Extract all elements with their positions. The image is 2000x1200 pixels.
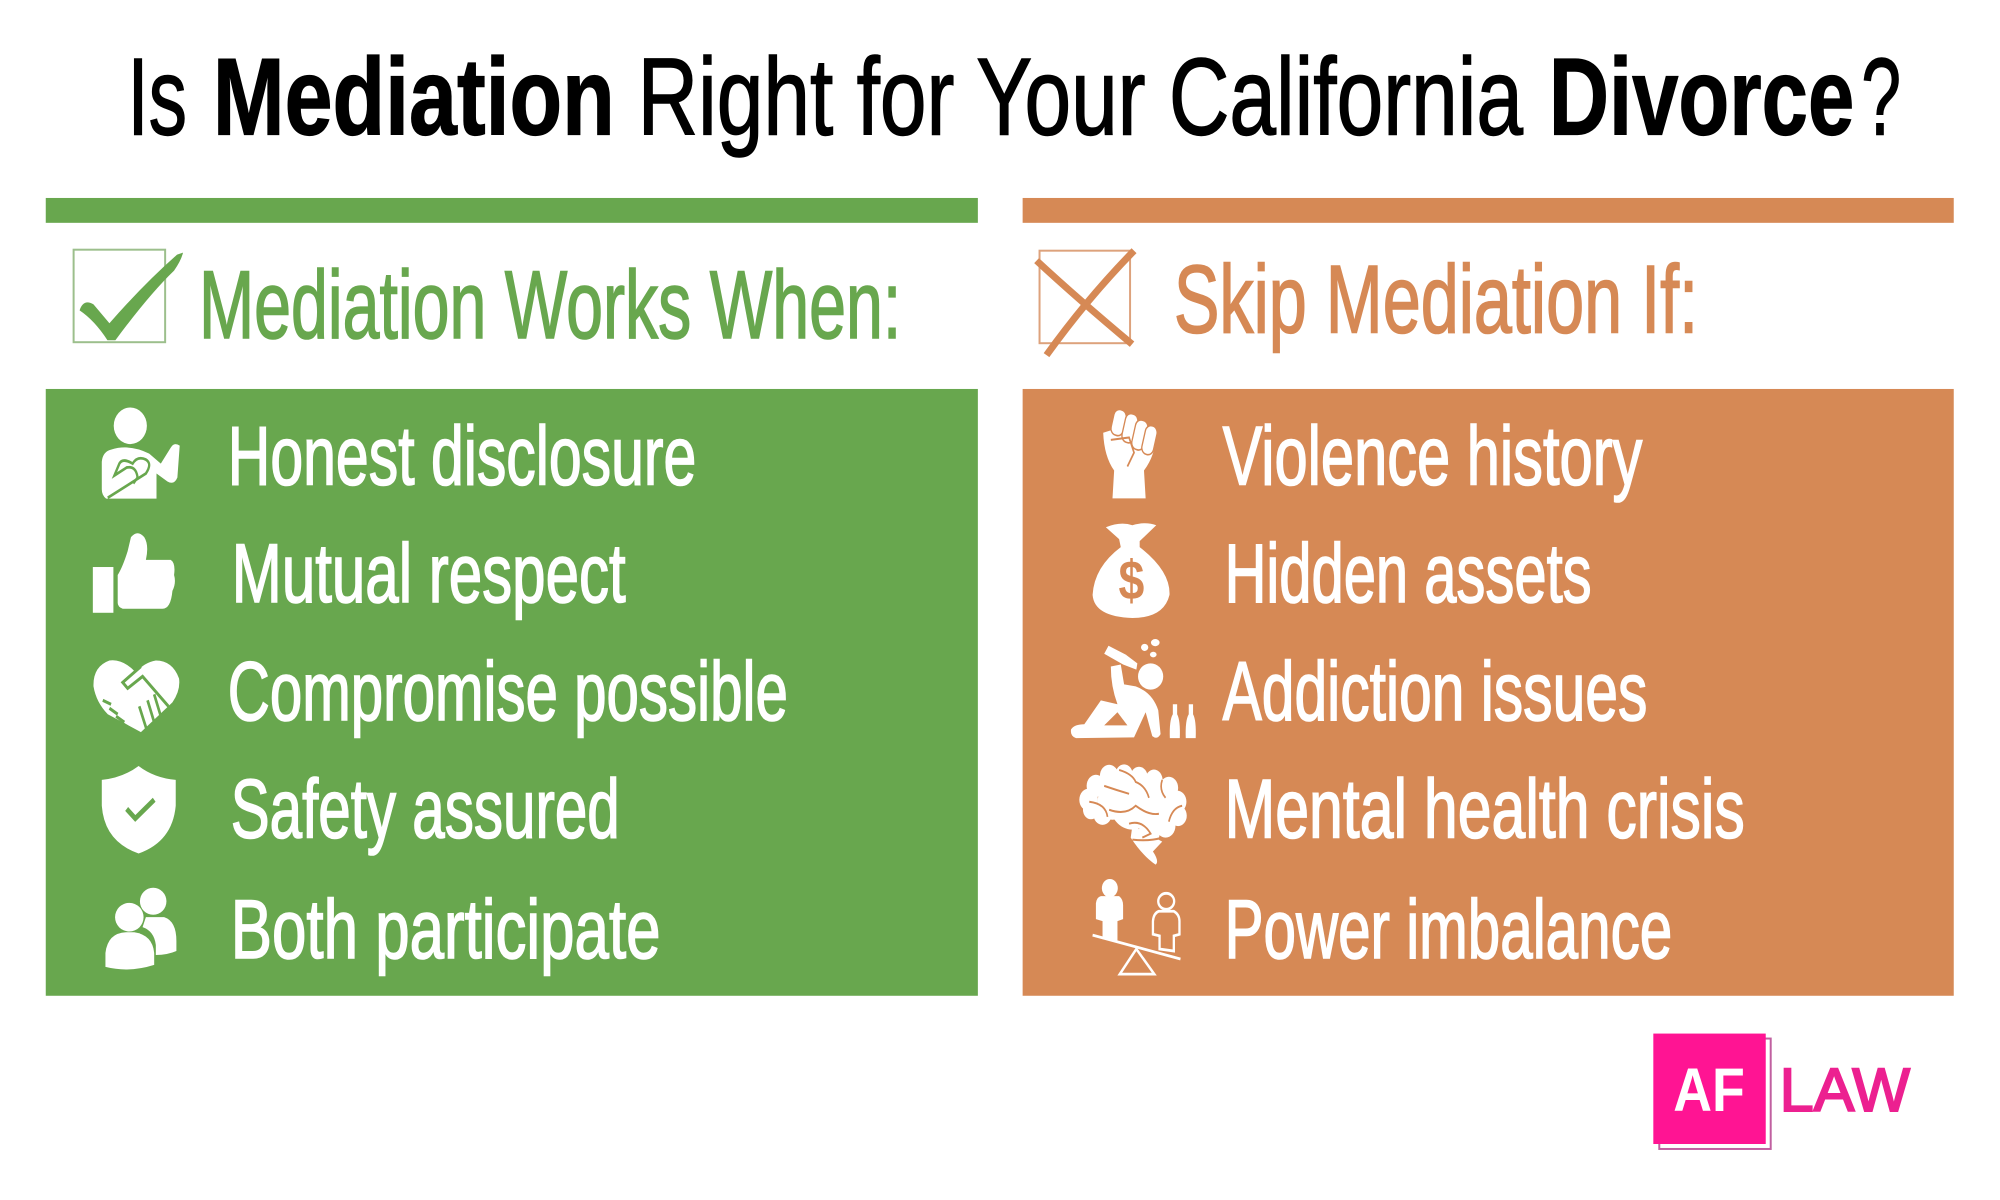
- text: safety assured: Safety assured: [231, 762, 620, 856]
- icon: x box: [1037, 251, 1134, 355]
- icon: safety shield: [102, 766, 176, 854]
- logo offset outline: [1659, 1039, 1771, 1149]
- heading: skip mediation if: Skip Mediation If:: [1174, 246, 1698, 353]
- green header bar: [46, 198, 978, 223]
- green list background: [46, 389, 978, 996]
- icon: drunk person with bottles: [1071, 639, 1196, 738]
- title: Is: [127, 36, 187, 158]
- icon: two people: [105, 888, 176, 969]
- orange list background: [1023, 389, 1954, 996]
- text: addiction issues: Addiction issues: [1223, 644, 1647, 738]
- title: [127, 36, 1901, 158]
- icon: raised fist: [1103, 408, 1158, 498]
- logo letters AF: AF: [1673, 1056, 1745, 1125]
- icon: check box: [74, 250, 183, 342]
- icon: honest person with heart: [102, 407, 180, 499]
- icon: thumbs up: [93, 533, 175, 613]
- text: mutual respect: Mutual respect: [232, 526, 626, 620]
- text: mental health crisis: Mental health crisis: [1225, 762, 1745, 856]
- panel: skip mediation if: [1023, 198, 1954, 996]
- title: Divorce: [1549, 36, 1854, 158]
- logo: AF Law: [1653, 1034, 1910, 1149]
- text: violence history: Violence history: [1223, 408, 1643, 502]
- text: compromise possible: Compromise possible: [228, 644, 788, 738]
- panel: mediation works when: [46, 198, 978, 996]
- icon: power imbalance seesaw: [1093, 879, 1180, 974]
- title: Right for Your California: [638, 36, 1523, 158]
- text: both participate: Both participate: [231, 882, 661, 976]
- text: honest disclosure: Honest disclosure: [228, 408, 696, 502]
- icon: money bag: $: [1118, 550, 1144, 612]
- orange header bar: [1023, 198, 1954, 223]
- icon: brain: [1079, 764, 1187, 865]
- text: power imbalance: Power imbalance: [1225, 882, 1672, 976]
- logo word LAW: LAW: [1780, 1056, 1910, 1125]
- text: hidden assets: Hidden assets: [1225, 526, 1592, 620]
- title: ?: [1861, 36, 1901, 158]
- heading: mediation works when: Mediation Works When:: [199, 252, 901, 359]
- logo pink square: [1653, 1034, 1766, 1144]
- title: Mediation: [213, 36, 615, 158]
- icon: money bag: [1093, 523, 1170, 618]
- icon: heart handshake: [93, 660, 179, 732]
